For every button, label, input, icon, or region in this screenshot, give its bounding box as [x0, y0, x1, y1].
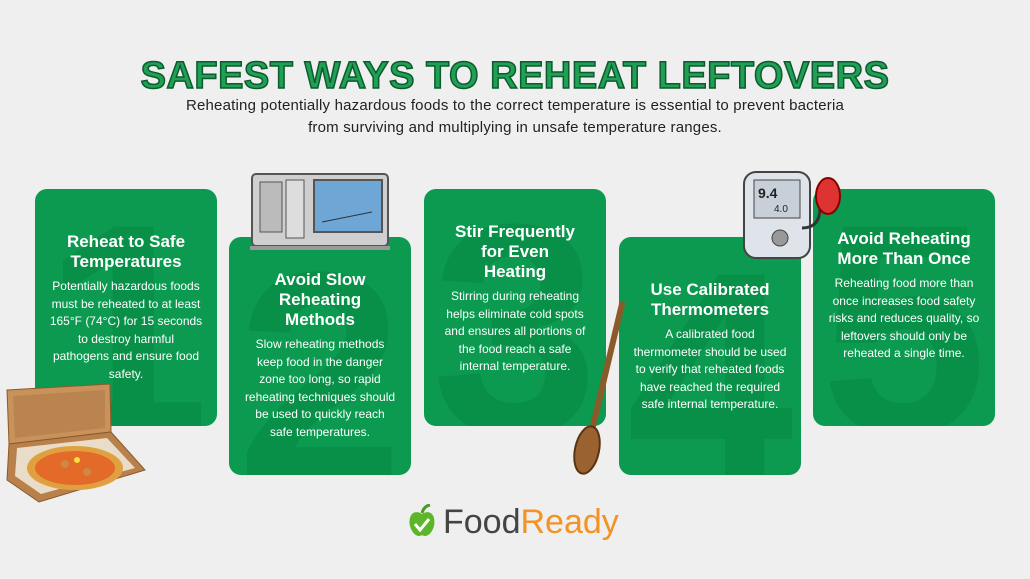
icon: wooden spoon: [573, 301, 625, 475]
subtitle: [186, 97, 844, 136]
icon: blood pressure monitor: 9.4: [758, 185, 778, 201]
icon: microwave: [250, 173, 390, 250]
text 5: Reheating food more than once increases food safety risks and reduces quality, so leftovers should only be reheated a single time.: [829, 276, 979, 360]
text 1: Potentially hazardous foods must be reheated to at least 165°F (74°C) for 15 seconds to destroy harmful pathogens and ensure food safety.: [50, 279, 202, 381]
heading 4: Use Calibrated Thermometers: [650, 280, 770, 319]
icon: apple: [409, 504, 434, 536]
subtitle: from surviving and multiplying in unsafe temperature ranges.: [308, 119, 722, 136]
icon: blood pressure monitor: 4.0: [774, 204, 788, 215]
text 2: Slow reheating methods keep food in the danger zone too long, so rapid reheating techniques should be used to quickly reach safe temperatures.: [245, 337, 395, 439]
text 3: Stirring during reheating helps eliminate cold spots and ensures all portions of the food reach a safe internal temperature.: [445, 289, 585, 373]
title: SAFEST WAYS TO REHEAT LEFTOVERS: [141, 55, 889, 97]
text 4: A calibrated food thermometer should be used to verify that reheated foods have reached the required safe internal temperature.: [634, 327, 786, 411]
heading 3: Stir Frequently for Even Heating: [455, 222, 575, 281]
logo: FoodReady: FoodReady: [443, 503, 619, 541]
heading 2: Avoid Slow Reheating Methods: [274, 270, 366, 329]
heading 5: Avoid Reheating More Than Once: [837, 229, 971, 268]
heading 1: Reheat to Safe Temperatures: [67, 232, 185, 271]
icon: pizza box: [6, 384, 146, 502]
subtitle: Reheating potentially hazardous foods to the correct temperature is essential to prevent bacteria: [186, 97, 844, 114]
icon: blood pressure monitor: [743, 171, 841, 259]
